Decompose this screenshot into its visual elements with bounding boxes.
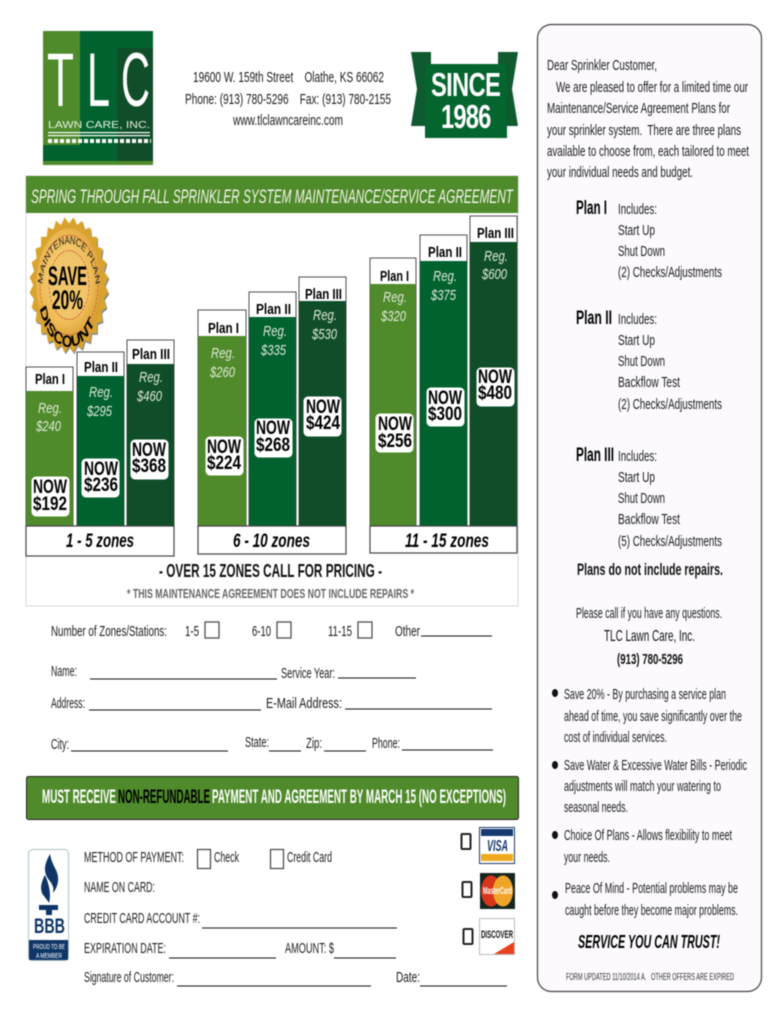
seal: save 20% discount: MAINTENANCE PLAN [37,236,101,284]
bar group: 6-10 zones [198,277,346,554]
bar: plan III 11-15 zones: $600 [481,266,507,283]
plan II details: Includes: [618,311,657,328]
signature and date row [84,969,507,986]
card option: MasterCard [462,873,515,909]
payment deadline banner [26,776,518,820]
plan I details [576,198,722,281]
expiration and amount row [84,940,396,958]
bar: plan II 11-15 zones: Plan II [428,244,462,261]
plan II details: Start Up [618,332,655,349]
zone label: 1-5 zones: 1 - 5 zones [66,531,134,552]
panel: customer letter sidebar [538,24,762,992]
panel: agreement pricing card [24,175,519,607]
bar group: 1-5 zones [26,340,174,556]
plan III details: Includes: [618,448,657,465]
zones selection row: 11-15 [328,623,352,640]
payment form [84,849,507,986]
zone label: 6-10 zones: 6 - 10 zones [233,531,310,552]
benefit: save 20%: cost of individual services. [564,729,667,746]
bar: plan II 1-5 zones: Reg. [89,384,113,401]
letter intro: Dear Sprinkler Customer, [547,57,657,74]
zone label: 11-15 zones [370,526,517,553]
company address [185,69,391,129]
repairs disclaimer: * THIS MAINTENANCE AGREEMENT DOES NOT INCLUDE REPAIRS * [127,587,414,601]
seal: save 20% discount: DISCOUNT [39,304,94,348]
zones selection row: Number of Zones/Stations: [51,623,167,640]
bar: plan I 11-15 zones: Reg. [383,289,407,306]
bar: plan II 6-10 zones: NOW [256,418,290,439]
bar: plan II 11-15 zones [420,235,467,526]
bar: plan III 1-5 zones: Reg. [139,369,163,386]
company address: Phone: (913) 780-5296 Fax: (913) 780-2155 [185,91,391,108]
name on card: NAME ON CARD: [84,879,155,896]
zone label: 6-10 zones [198,526,346,554]
card option: Visa [462,828,514,864]
contact block [576,605,722,668]
over 15 zones note: - OVER 15 ZONES CALL FOR PRICING - [159,561,382,581]
bar: plan III 6-10 zones: $530 [311,326,337,343]
icon: BBB accredited badge: PROUD TO BE [33,942,65,951]
bar: plan II 1-5 zones: Plan II [84,359,118,376]
address and email row: Address: [51,695,85,712]
signature and date row: Date: [396,969,420,986]
city state zip phone row: Zip: [306,735,322,752]
seal: save 20% discount: 20% [52,285,83,315]
company address: 19600 W. 159th Street Olathe, KS 66062 [193,69,384,86]
city state zip phone row: City: [51,736,69,753]
since 1986 badge: SINCE [431,67,501,104]
city state zip phone row: Phone: [372,735,400,752]
bar: plan III 11-15 zones: Reg. [484,248,508,265]
icon: BBB accredited badge [28,850,68,960]
logo: TLC Lawn Care: T [47,38,74,123]
payment deadline banner: PAYMENT AND AGREEMENT BY MARCH 15 (NO EXCEPTIONS) [212,787,506,808]
contact block: TLC Lawn Care, Inc. [604,628,695,645]
benefit: choice of plans: your needs. [564,849,610,866]
logo: TLC Lawn Care: C [121,38,150,123]
icon: BBB accredited badge: BBB [34,915,65,938]
card option: MasterCard: MasterCard [483,886,512,897]
bar: plan II 6-10 zones: Plan II [256,301,291,318]
city state zip phone row: State: [245,734,269,751]
zones selection row: 1-5 [185,623,199,640]
bar: plan II 6-10 zones: $268 [256,435,290,456]
bar: plan III 11-15 zones: $480 [478,383,512,404]
expiration and amount row: EXPIRATION DATE: [84,940,166,957]
bar: plan III 1-5 zones [127,340,174,526]
signature and date row: Signature of Customer: [84,969,174,986]
bar: plan I 1-5 zones: Reg. [38,400,62,417]
address and email row [51,695,492,712]
bar: plan II 6-10 zones [249,292,296,526]
plan III details: Plan III [576,445,614,466]
card option: Discover [464,918,514,954]
bar: plan II 1-5 zones: $236 [84,475,118,496]
bar: plan II 1-5 zones: $295 [86,403,112,420]
name and service year row: Service Year: [281,665,335,682]
city state zip phone row [51,734,493,753]
name and service year row: Name: [51,663,77,680]
bar: plan I 11-15 zones: $256 [378,431,412,452]
plan II details: Backflow Test [618,374,681,391]
bar: plan I 11-15 zones: Plan I [380,268,409,285]
icon: BBB accredited badge: A MEMBER [36,951,62,960]
method of payment row: Credit Card [287,849,332,866]
card option: Visa: VISA [487,838,508,855]
benefit: save water [552,757,747,816]
plan I details: Start Up [618,222,655,239]
bar: plan I 11-15 zones [370,258,416,526]
plan III details: Start Up [618,469,655,486]
bar: plan I 6-10 zones [198,310,246,526]
zones selection row [51,622,492,640]
bar: plan III 6-10 zones: NOW [306,397,340,418]
bar: plan I 6-10 zones: $224 [207,453,241,474]
seal: save 20% discount [29,217,110,354]
bar: plan II 6-10 zones: $335 [260,342,286,359]
bar: plan II 11-15 zones: NOW [428,388,462,409]
name and service year row [51,663,416,682]
address and email row: E-Mail Address: [266,695,342,712]
bar: plan III 6-10 zones: Reg. [313,307,337,324]
letter intro [547,57,750,181]
contact block: (913) 780-5296 [617,651,683,668]
zones selection row: 6-10 [252,623,271,640]
seal: save 20% discount: SAVE [48,261,87,291]
payment deadline banner: NON-REFUNDABLE [118,787,210,808]
letter intro: your individual needs and budget. [547,164,693,181]
bar: plan II 1-5 zones: NOW [84,459,118,480]
bar: plan I 1-5 zones: $240 [35,418,61,435]
bar: plan II 11-15 zones: $375 [430,287,456,304]
bar: plan II 11-15 zones: $300 [428,404,462,425]
bar: plan III 11-15 zones: NOW [478,367,512,388]
payment deadline banner: MUST RECEIVE [42,787,116,808]
benefit: save water: seasonal needs. [564,799,628,816]
bar group: 11-15 zones [370,216,517,553]
benefit: choice of plans [552,827,732,866]
bar: plan III 1-5 zones: NOW [132,440,166,461]
since 1986 badge [411,52,518,138]
bar: plan III 11-15 zones [470,216,517,526]
logo: TLC Lawn Care: L [87,38,110,123]
bar: plan I 11-15 zones: NOW [378,414,412,435]
bar: plan I 6-10 zones: Plan I [208,320,239,337]
bar: plan III 1-5 zones: $368 [132,456,166,477]
bar: plan I 1-5 zones: Plan I [35,371,65,388]
zone label: 11-15 zones: 11 - 15 zones [405,531,489,552]
logo: TLC Lawn Care [43,31,153,165]
method of payment row [84,849,332,868]
customer form [51,622,493,753]
bar: plan II 1-5 zones [77,352,124,526]
bar: plan I 6-10 zones: Reg. [211,345,235,362]
bar: plan I 1-5 zones: NOW [33,477,67,498]
since 1986 badge: 1986 [441,99,491,136]
plan III details [576,445,722,550]
bar: plan I 6-10 zones: NOW [207,437,241,458]
expiration and amount row: AMOUNT: $ [285,940,334,957]
card option: Discover: DISCOVER [481,929,513,941]
bar: plan I 6-10 zones: $260 [209,364,235,381]
plan I details: Plan I [576,198,607,219]
bar: plan III 6-10 zones: $424 [306,413,340,434]
method of payment row: METHOD OF PAYMENT: [84,849,184,866]
plan I details: Includes: [618,201,657,218]
benefit: peace of mind [552,880,738,919]
plan III details: Backflow Test [618,511,681,528]
bar: plan III 6-10 zones: Plan III [305,286,342,303]
heading banner [26,176,518,213]
zone label: 1-5 zones [26,526,174,556]
bar: plan III 6-10 zones [299,277,346,526]
plan II details: Shut Down [618,353,665,370]
benefit: save 20% [552,686,742,746]
logo: TLC Lawn Care: LAWN CARE, INC. [48,120,150,131]
method of payment row: Check [214,849,239,866]
card account row: CREDIT CARD ACCOUNT #: [84,910,200,927]
plan II details: Plan II [576,308,612,329]
bar: plan III 11-15 zones: Plan III [477,225,514,242]
bar: plan III 1-5 zones: $460 [136,388,162,405]
bar: plan III 1-5 zones: Plan III [132,346,170,363]
zones selection row: Other [395,623,420,640]
bar: plan I 1-5 zones [26,367,73,526]
plan III details: Shut Down [618,490,665,507]
bar: plan II 6-10 zones: Reg. [263,323,287,340]
bar: plan II 11-15 zones: Reg. [433,268,457,285]
bar: plan I 11-15 zones: $320 [380,308,406,325]
plan II details [576,308,722,413]
bar: plan I 1-5 zones: $192 [33,494,67,515]
company address: www.tlclawncareinc.com [232,112,343,129]
plan I details: Shut Down [618,243,665,260]
